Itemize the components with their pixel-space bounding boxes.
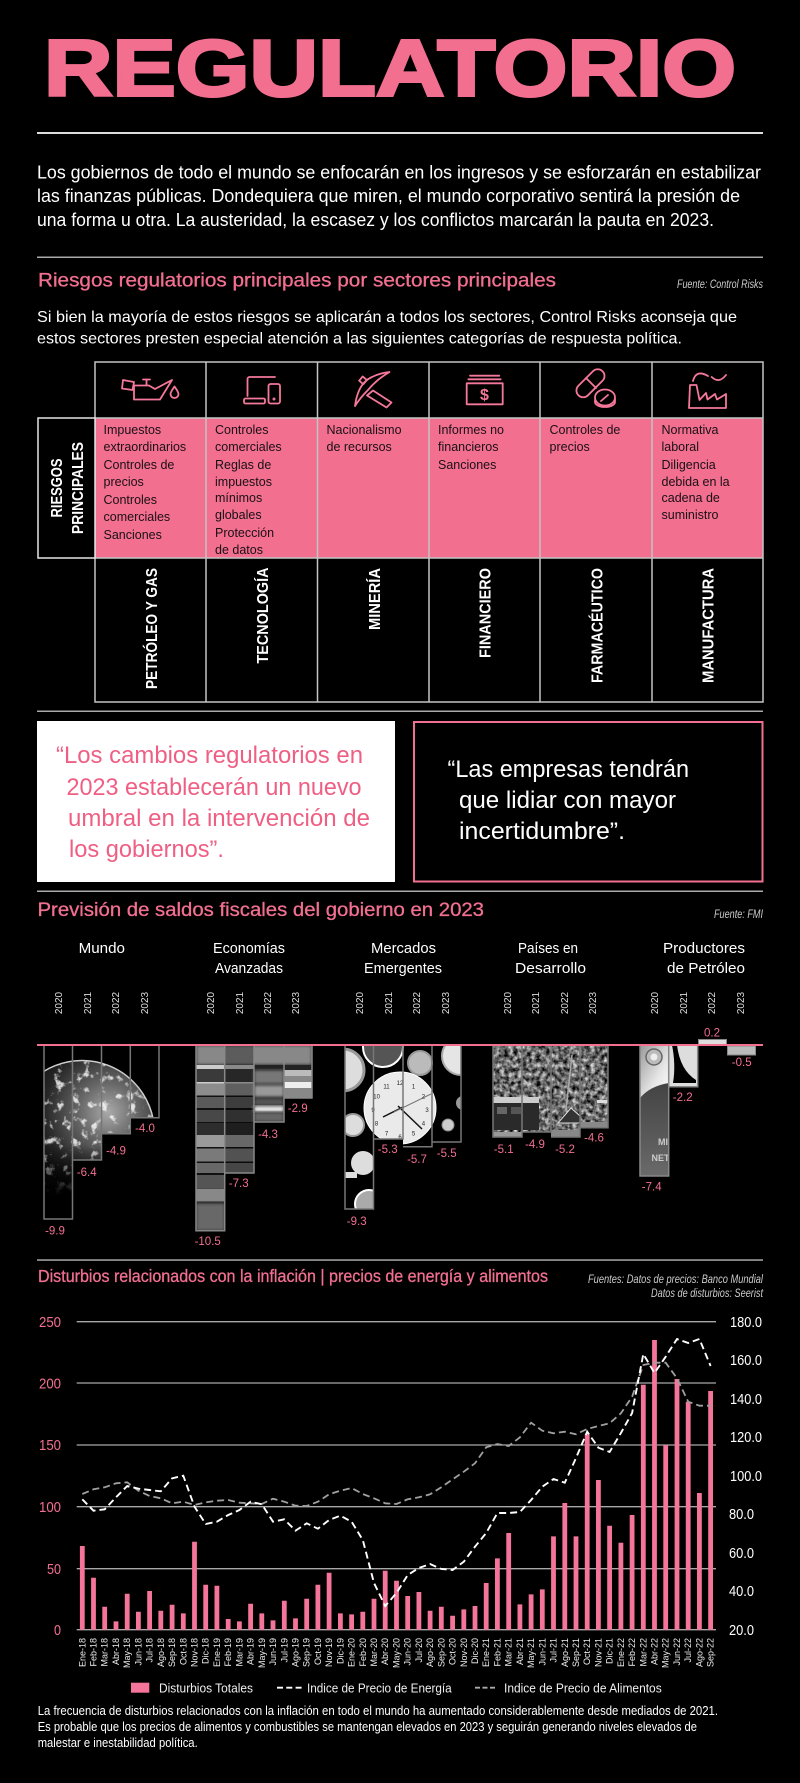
heading: disturbios: Disturbios relacionados con la inflación | precios de energía y alimentos (38, 1266, 548, 1286)
intro text: las finanzas públicas. Dondequiera que miren, el mundo corporativo sentirá la presión de (37, 186, 740, 206)
footer text (38, 1704, 718, 1750)
group labels (79, 940, 745, 977)
callout: white quote: “Los cambios regulatorios en (56, 742, 363, 769)
month labels: Abr-20 (380, 1638, 390, 1665)
column: tecnologia risks: Reglas de (215, 458, 271, 472)
intro text: una forma u otra. La austeridad, la escasez y los conflictos marcarán la pauta en 2023. (37, 210, 714, 230)
column: petroleo y gas risks: Impuestos (104, 423, 161, 437)
column: mineria risks (326, 423, 402, 454)
column: farmaceutico risks: Controles de (550, 423, 620, 437)
right axis labels: 80.0 (729, 1507, 754, 1523)
month labels: Jul-21 (548, 1638, 558, 1663)
right axis labels: 160.0 (730, 1353, 762, 1369)
month labels: Jun-19 (268, 1638, 278, 1666)
year labels: 2023 (291, 991, 302, 1014)
group labels: de Petróleo (667, 960, 745, 977)
year labels: 2020 (355, 991, 366, 1014)
callout: white quote (37, 721, 395, 882)
table: row header box: PRINCIPALES (70, 442, 87, 534)
column: petroleo y gas risks: extraordinarios (104, 440, 186, 454)
sector names: TECNOLOGÍA (253, 567, 272, 664)
right axis labels: 60.0 (729, 1546, 754, 1562)
year labels: 2021 (235, 991, 246, 1014)
value labels: -5.3 (378, 1144, 398, 1156)
column: manufactura risks (662, 423, 730, 522)
year labels: 2021 (531, 991, 542, 1014)
icon: laptop and phone (244, 377, 280, 404)
column: financiero risks: Sanciones (438, 458, 496, 472)
heading: riesgos regulatorios: Riesgos regulatorios principales por sectores principales (38, 270, 556, 292)
year labels: 2020 (206, 991, 217, 1014)
clock face numbers: 7 (385, 1131, 389, 1137)
month labels: Oct-20 (448, 1638, 458, 1665)
icon: oil can (122, 380, 178, 400)
combo chart: disturbios y precios (39, 1314, 762, 1696)
sector names (142, 567, 718, 689)
month labels: Nov-19 (324, 1638, 334, 1667)
column: farmaceutico risks (550, 423, 620, 454)
group labels: Países en (518, 940, 578, 957)
heading: saldos fiscales: Previsión de saldos fiscales del gobierno en 2023 (38, 900, 484, 921)
month labels: Jun-22 (672, 1638, 682, 1666)
value labels: -4.3 (258, 1129, 278, 1141)
month labels: Ene-20 (347, 1638, 357, 1667)
left axis labels: 100 (39, 1499, 61, 1516)
table: riesgos por sector (38, 362, 763, 702)
month labels: May-21 (526, 1638, 536, 1668)
bar: 0.2 (698, 1040, 726, 1045)
sector names: PETRÓLEO Y GAS (142, 568, 161, 689)
right axis labels (729, 1315, 762, 1639)
month labels: Ago-19 (290, 1638, 300, 1667)
column: tecnologia risks (215, 423, 282, 557)
month labels: Oct-21 (582, 1638, 592, 1665)
year labels: 2023 (140, 991, 151, 1014)
month labels: Ene-19 (212, 1638, 222, 1667)
month labels: Abr-18 (111, 1638, 121, 1665)
table: row header box: RIESGOS (49, 458, 66, 518)
value labels: -9.3 (347, 1216, 367, 1228)
title: REGULATORIO (44, 24, 736, 112)
left axis labels: 50 (47, 1561, 61, 1578)
month labels: Feb-18 (88, 1638, 98, 1667)
month labels: May-18 (122, 1638, 132, 1668)
month labels: Ene-22 (616, 1638, 626, 1667)
month labels: Sep-20 (436, 1638, 446, 1667)
column: petroleo y gas risks: Sanciones (104, 528, 162, 542)
month labels: May-20 (392, 1638, 402, 1668)
clock face numbers (371, 1081, 429, 1141)
column: manufactura risks: laboral (662, 440, 699, 454)
month labels: Mar-18 (100, 1638, 110, 1667)
month labels: Ago-22 (694, 1638, 704, 1667)
value labels: -4.9 (525, 1139, 545, 1151)
column: petroleo y gas risks (104, 423, 186, 542)
column: tecnologia risks: comerciales (215, 440, 282, 454)
month labels: May-19 (257, 1638, 267, 1668)
month labels: Sep-18 (167, 1638, 177, 1667)
column: petroleo y gas risks: precios (104, 475, 144, 489)
month labels: Jun-21 (537, 1638, 547, 1666)
sector intro text (37, 309, 737, 348)
clock face numbers: 3 (425, 1108, 429, 1114)
bars: mundo (earth image) (43, 1046, 160, 1220)
month labels: Feb-19 (223, 1638, 233, 1667)
column: manufactura risks: debida en la (662, 475, 730, 489)
year labels: 2023 (588, 991, 599, 1014)
value labels: -4.6 (584, 1133, 604, 1145)
bars: paises en desarrollo (forest image) (493, 1045, 608, 1137)
icon: factory (689, 373, 726, 408)
meter lettering (652, 1138, 668, 1161)
value labels: -5.7 (407, 1154, 427, 1166)
left axis labels: 250 (39, 1314, 61, 1331)
icon: cash stack (467, 376, 503, 404)
month labels: Dic-20 (470, 1638, 480, 1664)
right axis labels: 180.0 (730, 1315, 762, 1331)
intro text (37, 162, 761, 230)
bar: -0.5 (728, 1046, 756, 1055)
month labels: Oct-18 (178, 1638, 188, 1665)
icon: cash stack: $ (480, 387, 489, 404)
value labels: -9.9 (45, 1226, 65, 1238)
month labels: Mar-20 (369, 1638, 379, 1667)
month labels: Mar-21 (504, 1638, 514, 1667)
month labels: Jul-22 (683, 1638, 693, 1663)
footer text: malestar e inestabilidad política. (38, 1736, 198, 1750)
month labels: Jul-19 (279, 1638, 289, 1663)
column: farmaceutico risks: precios (550, 440, 590, 454)
month labels: Ago-20 (425, 1638, 435, 1667)
column: tecnologia risks: Controles (215, 423, 268, 437)
month labels: Ene-21 (481, 1638, 491, 1667)
source: control risks: Fuente: Control Risks (677, 279, 763, 291)
group labels: Desarrollo (515, 960, 586, 977)
column: tecnologia risks: impuestos (215, 475, 272, 489)
left axis labels: 0 (54, 1622, 61, 1639)
clock face numbers: 1 (412, 1085, 416, 1091)
month labels: Nov-21 (593, 1638, 603, 1667)
column: manufactura risks: suministro (662, 508, 719, 522)
month labels: Sep-22 (706, 1638, 716, 1667)
group labels: Economías (213, 940, 285, 957)
callout: white quote: 2023 establecerán un nuevo (66, 774, 362, 801)
month labels: Sep-21 (571, 1638, 581, 1667)
month labels: Abr-21 (515, 1638, 525, 1665)
clock face numbers: 4 (422, 1122, 426, 1128)
month labels (77, 1638, 716, 1668)
column: petroleo y gas risks: Controles (104, 493, 157, 507)
column: mineria risks: Nacionalismo (326, 423, 402, 437)
footer text: Es probable que los precios de alimentos y combustibles se mantengan elevados en 2023 y seguirán generando niveles elevados de (38, 1720, 697, 1734)
sector names: FINANCIERO (478, 568, 494, 658)
month labels: Dic-21 (605, 1638, 615, 1664)
month labels: Ago-18 (156, 1638, 166, 1667)
month labels: Jul-18 (145, 1638, 155, 1663)
left axis labels (39, 1314, 61, 1639)
icon: pills (574, 366, 615, 407)
clock face numbers: 6 (398, 1135, 402, 1141)
group labels: Mundo (79, 940, 125, 957)
bars: productores de petroleo (metal image) (640, 1040, 756, 1176)
callout: outlined quote: que lidiar con mayor (459, 787, 676, 814)
meter lettering: MI (658, 1137, 668, 1147)
month labels: Nov-20 (459, 1638, 469, 1667)
bars: economias avanzadas (coins image) (196, 1045, 312, 1231)
month labels: Oct-19 (313, 1638, 323, 1665)
column: financiero risks: financieros (438, 440, 498, 454)
clock face numbers: 10 (373, 1094, 381, 1100)
callout: outlined quote (414, 722, 762, 882)
clock face numbers: 2 (422, 1094, 426, 1100)
group labels: Emergentes (364, 960, 442, 977)
legend (131, 1682, 662, 1696)
year labels: 2021 (83, 991, 94, 1014)
value labels: -5.1 (494, 1144, 514, 1156)
intro text: Los gobiernos de todo el mundo se enfocarán en los ingresos y se esforzarán en estabilizar (37, 162, 761, 182)
month labels: Jul-20 (414, 1638, 424, 1663)
month labels: Ago-21 (560, 1638, 570, 1667)
year labels: 2022 (263, 991, 274, 1014)
column: manufactura risks: Normativa (662, 423, 719, 437)
value labels: 0.2 (704, 1028, 720, 1040)
value labels: -2.9 (288, 1103, 308, 1115)
column: mineria risks: de recursos (326, 440, 392, 454)
callout: white quote: los gobiernos”. (69, 836, 224, 863)
month labels: Feb-21 (492, 1638, 502, 1667)
sources: banco mundial, seerist: Datos de disturbios: Seerist (651, 1286, 763, 1300)
month labels: Mar-19 (234, 1638, 244, 1667)
right axis labels: 40.0 (729, 1584, 754, 1600)
value labels: -5.2 (555, 1144, 575, 1156)
month labels: Dic-19 (335, 1638, 345, 1664)
line: indice de precio de energia (82, 1339, 711, 1606)
month labels: Jun-20 (403, 1638, 413, 1666)
year labels: 2020 (650, 991, 661, 1014)
column: tecnologia risks: de datos (215, 543, 263, 557)
source: fmi: Fuente: FMI (714, 909, 764, 921)
callout: outlined quote: “Las empresas tendrán (448, 756, 689, 783)
year labels (54, 991, 747, 1014)
legend: Disturbios Totales (159, 1682, 253, 1696)
value labels: -6.4 (77, 1167, 97, 1179)
clock face numbers: 11 (383, 1085, 390, 1091)
legend: Indice de Precio de Alimentos (504, 1682, 662, 1696)
column: petroleo y gas risks: comerciales (104, 510, 170, 524)
column: manufactura risks: Diligencia (662, 458, 716, 472)
column: tecnologia risks: Protección (215, 526, 274, 540)
value labels: -10.5 (195, 1236, 221, 1248)
value labels: -7.3 (229, 1178, 249, 1190)
fiscal chart (9, 940, 763, 1248)
month labels: Abr-19 (246, 1638, 256, 1665)
year labels: 2021 (384, 991, 395, 1014)
legend: Indice de Precio de Energía (307, 1682, 452, 1696)
column: petroleo y gas risks: Controles de (104, 458, 174, 472)
column: tecnologia risks: globales (215, 508, 262, 522)
right axis labels: 140.0 (730, 1392, 762, 1408)
clock face numbers: 9 (371, 1108, 375, 1114)
month labels: Feb-22 (627, 1638, 637, 1667)
year labels: 2022 (111, 991, 122, 1014)
value labels: -2.2 (673, 1092, 693, 1104)
year labels: 2023 (441, 991, 452, 1014)
table: row header box (38, 418, 95, 558)
sector names: MINERÍA (365, 568, 384, 630)
zero line (37, 1044, 763, 1046)
clock face numbers: 5 (412, 1131, 416, 1137)
table: grid (95, 362, 763, 702)
column: tecnologia risks: mínimos (215, 491, 262, 505)
sector intro text: estos sectores presten especial atención a las siguientes categorías de respuesta política. (37, 330, 682, 348)
year labels: 2022 (707, 991, 718, 1014)
value labels (45, 1028, 752, 1248)
group labels: Avanzadas (215, 960, 283, 977)
year labels: 2020 (503, 991, 514, 1014)
month labels: Feb-20 (358, 1638, 368, 1667)
left axis labels: 150 (39, 1437, 61, 1454)
sources: banco mundial, seerist (588, 1272, 763, 1300)
month labels: Sep-19 (302, 1638, 312, 1667)
month labels: Ene-18 (77, 1638, 87, 1667)
value labels: -5.5 (437, 1148, 457, 1160)
group labels: Mercados (371, 940, 436, 957)
value labels: -4.0 (135, 1123, 155, 1135)
clock face numbers: 12 (397, 1081, 404, 1087)
month labels: Dic-18 (201, 1638, 211, 1664)
month labels: Abr-22 (650, 1638, 660, 1665)
right axis labels: 100.0 (730, 1469, 762, 1485)
year labels: 2021 (679, 991, 690, 1014)
table: pink risks band (95, 418, 763, 558)
icon: pickaxe (355, 372, 392, 408)
value labels: -0.5 (732, 1057, 752, 1069)
month labels: May-22 (661, 1638, 671, 1668)
year labels: 2020 (54, 991, 65, 1014)
month labels: Jun-18 (133, 1638, 143, 1666)
callout: outlined quote: incertidumbre”. (459, 818, 625, 845)
bars: mercados emergentes (clocks image) (344, 1046, 462, 1210)
value labels: -4.9 (106, 1146, 126, 1158)
month labels: Mar-22 (638, 1638, 648, 1667)
group labels: Productores (663, 940, 745, 957)
month labels: Nov-18 (190, 1638, 200, 1667)
sector names: FARMACÉUTICO (588, 568, 606, 683)
year labels: 2022 (560, 991, 571, 1014)
callout: white quote: umbral en la intervención de (68, 805, 370, 832)
bars: disturbios totales (80, 1340, 713, 1630)
year labels: 2022 (412, 991, 423, 1014)
right axis labels: 120.0 (730, 1430, 762, 1446)
sector names: MANUFACTURA (700, 568, 718, 683)
line: indice de precio de alimentos (82, 1363, 711, 1506)
left axis labels: 200 (39, 1376, 61, 1392)
clock face numbers: 8 (375, 1122, 379, 1128)
right axis labels: 20.0 (729, 1623, 754, 1639)
sector intro text: Si bien la mayoría de estos riesgos se aplicarán a todos los sectores, Control Risks aconseja que (37, 309, 737, 326)
year labels: 2023 (736, 991, 747, 1014)
column: financiero risks (438, 423, 504, 472)
value labels: -7.4 (642, 1182, 662, 1194)
footer text: La frecuencia de disturbios relacionados con la inflación en todo el mundo ha aumentado considerablemente desde mediados de 2021. (38, 1704, 718, 1718)
column: financiero risks: Informes no (438, 423, 504, 437)
column: manufactura risks: cadena de (662, 491, 720, 505)
meter lettering: NET (652, 1153, 670, 1163)
